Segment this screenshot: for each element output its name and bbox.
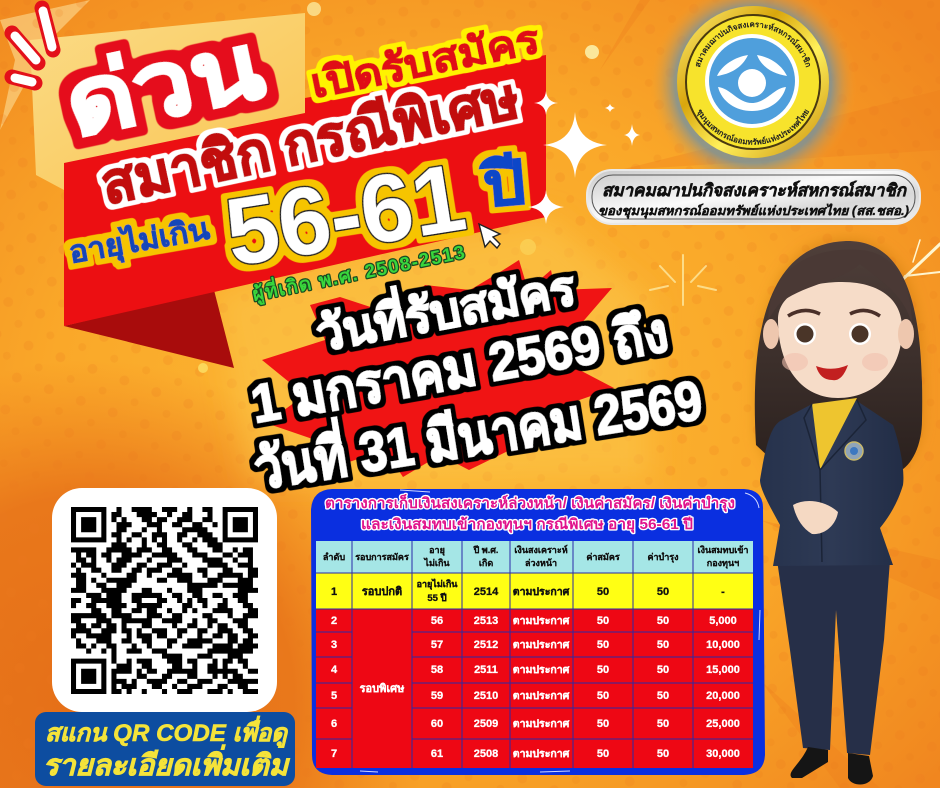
table rows 2-7: ตามประกาศ <box>513 690 570 702</box>
table rows 2-7: 15,000 <box>706 664 740 676</box>
lapels <box>804 400 866 562</box>
table header row: ไม่เกิน <box>423 557 450 568</box>
table header row: รอบการสมัคร <box>355 552 409 562</box>
table rows 2-7: 60 <box>431 718 443 730</box>
text: start date: 1 มกราคม 2569 ถึง <box>247 302 673 435</box>
illustration: character <box>755 240 922 785</box>
table rows 2-7: 50 <box>657 615 669 627</box>
table rows 2-7: 6 <box>331 718 337 730</box>
table rows 2-7: 57 <box>431 639 443 651</box>
table row 1: รอบปกติ <box>362 585 402 598</box>
table header row: เกิด <box>479 558 493 568</box>
panel: cream backing box <box>30 13 305 190</box>
blush <box>782 353 808 371</box>
table rows 2-7: 2512 <box>474 639 498 651</box>
table rows 2-7: ตามประกาศ <box>513 748 570 760</box>
table row 1: 50 <box>657 586 669 598</box>
panel: organisation name pill: สมาคมฌาปนกิจสงเคราะห์สหกรณ์สมาชิก <box>602 180 908 200</box>
eyes <box>794 323 816 345</box>
panel: red banner <box>64 55 546 326</box>
table rows 2-7 <box>316 609 753 768</box>
panel: red fold triangle <box>64 290 234 368</box>
table header row: เงินสมทบเข้า <box>698 545 748 555</box>
table rows 2-7: 30,000 <box>706 748 740 760</box>
text: years: ปี <box>477 149 528 219</box>
table rows 2-7: 2509 <box>474 718 498 730</box>
table rows 2-7: 7 <box>331 748 337 760</box>
trousers <box>777 560 890 755</box>
jacket <box>760 401 903 566</box>
table header row: กองทุนฯ <box>707 558 739 569</box>
table rows 2-7: 50 <box>657 664 669 676</box>
icon: mouse cursor <box>479 224 500 248</box>
table rows 2-7: 5 <box>331 690 337 702</box>
table rows 2-7: 50 <box>597 615 609 627</box>
table rows 2-7: 56 <box>431 615 443 627</box>
text: end date: วันที่ 31 มีนาคม 2569 <box>249 360 706 501</box>
table title <box>325 493 735 533</box>
table rows 2-7: 50 <box>597 748 609 760</box>
table header row: ค่าสมัคร <box>586 552 620 562</box>
table rows 2-7: 61 <box>431 748 443 760</box>
table rows 2-7: ตามประกาศ <box>513 664 570 676</box>
shoes <box>791 747 828 778</box>
table rows 2-7: 5,000 <box>709 615 737 627</box>
logo <box>656 0 850 169</box>
heading: urgent: ด่วน <box>57 15 272 156</box>
table row 1: - <box>721 586 725 598</box>
table title: ตารางการเก็บเงินสงเคราะห์ล่วงหน้า/ เงินค่าสมัคร/ เงินค่าบำรุง <box>325 493 735 512</box>
table header row: ล่วงหน้า <box>525 558 557 568</box>
hair <box>755 241 922 472</box>
table rows 2-7: ตามประกาศ <box>513 718 570 730</box>
table header row: อายุ <box>429 545 445 556</box>
heading: open for applications: เปิดรับสมัคร <box>307 17 544 107</box>
table rows 2-7: 2 <box>331 615 337 627</box>
panel: contribution table <box>311 489 765 775</box>
heading: special members: สมาชิก กรณีพิเศษ <box>95 66 524 216</box>
table rows 2-7: 25,000 <box>706 718 740 730</box>
hands <box>793 501 838 534</box>
table rows 2-7: 50 <box>657 748 669 760</box>
table rows 2-7: 50 <box>597 718 609 730</box>
icon: attention burst lines <box>12 8 53 83</box>
table rows 2-7: 2511 <box>474 664 498 676</box>
panel: cream backing of date area <box>214 217 650 480</box>
QR code <box>71 507 258 694</box>
table rows 2-7: 50 <box>657 690 669 702</box>
face <box>778 282 902 398</box>
badge <box>845 442 863 460</box>
number: age range: 56-61 <box>219 144 472 287</box>
table rows 2-7: 20,000 <box>706 690 740 702</box>
table row 1: 2514 <box>474 586 499 598</box>
table header row: เงินสงเคราะห์ <box>514 544 568 555</box>
text: age not over: อายุไม่เกิน <box>66 211 213 272</box>
table rows 2-7: 4 <box>331 664 338 676</box>
table header row: ลำดับ <box>323 552 345 562</box>
fringe <box>768 250 912 325</box>
logo: ชุมนุมสหกรณ์ออมทรัพย์แห่งประเทศไทย <box>696 109 810 145</box>
icon: flare by hair <box>900 240 940 282</box>
heading: application dates: วันที่รับสมัคร <box>311 253 580 362</box>
table row 1: 1 <box>331 586 337 598</box>
table rows 2-7: ตามประกาศ <box>513 639 570 651</box>
panel: organisation name pill <box>587 170 920 224</box>
table header row: ค่าบำรุง <box>647 552 679 563</box>
table rows 2-7: 50 <box>597 664 609 676</box>
table rows 2-7: รอบพิเศษ <box>360 682 405 695</box>
panel: QR caption: สแกน QR CODE เพื่อดู <box>45 715 288 748</box>
table rows 2-7: 2513 <box>474 615 498 627</box>
panel: red starburst <box>262 260 614 477</box>
table rows 2-7: 2508 <box>474 748 498 760</box>
table row 1: 50 <box>597 586 609 598</box>
table rows 2-7: 58 <box>431 664 443 676</box>
table rows 2-7: 3 <box>331 639 337 651</box>
table rows 2-7: 59 <box>431 690 443 702</box>
panel: QR caption <box>35 712 295 786</box>
table row 1: อายุไม่เกิน <box>417 578 458 590</box>
table row 1: ตามประกาศ <box>513 586 570 598</box>
table rows 2-7: 50 <box>657 639 669 651</box>
table rows 2-7: 50 <box>597 690 609 702</box>
panel: QR card <box>52 488 277 712</box>
panel: QR caption: รายละเอียดเพิ่มเติม <box>43 744 290 782</box>
table rows 2-7: ตามประกาศ <box>513 615 570 627</box>
table header row <box>316 541 753 573</box>
table rows 2-7: 50 <box>597 639 609 651</box>
table row 1: 55 ปี <box>427 592 447 604</box>
icon: sparkles <box>528 91 640 224</box>
table header row: ปี พ.ศ. <box>472 545 498 555</box>
table row 1 <box>316 573 753 609</box>
shirt <box>812 398 857 470</box>
table rows 2-7: 2510 <box>474 690 498 702</box>
text: birth years: ผู้ที่เกิด พ.ศ. 2508-2513 <box>250 238 467 307</box>
mouth <box>816 365 848 380</box>
panel: organisation name pill: ของชุมนุมสหกรณ์ออมทรัพย์แห่งประเทศไทย (สส.ชสอ.) <box>598 203 909 219</box>
icon: firework <box>650 255 716 305</box>
logo: สมาคมฌาปนกิจสงเคราะห์สหกรณ์สมาชิก <box>696 22 810 68</box>
table rows 2-7: 50 <box>657 718 669 730</box>
table title: และเงินสมทบเข้ากองทุนฯ กรณีพิเศษ อายุ 56-61 ปี <box>361 516 693 533</box>
table rows 2-7: 10,000 <box>706 639 740 651</box>
